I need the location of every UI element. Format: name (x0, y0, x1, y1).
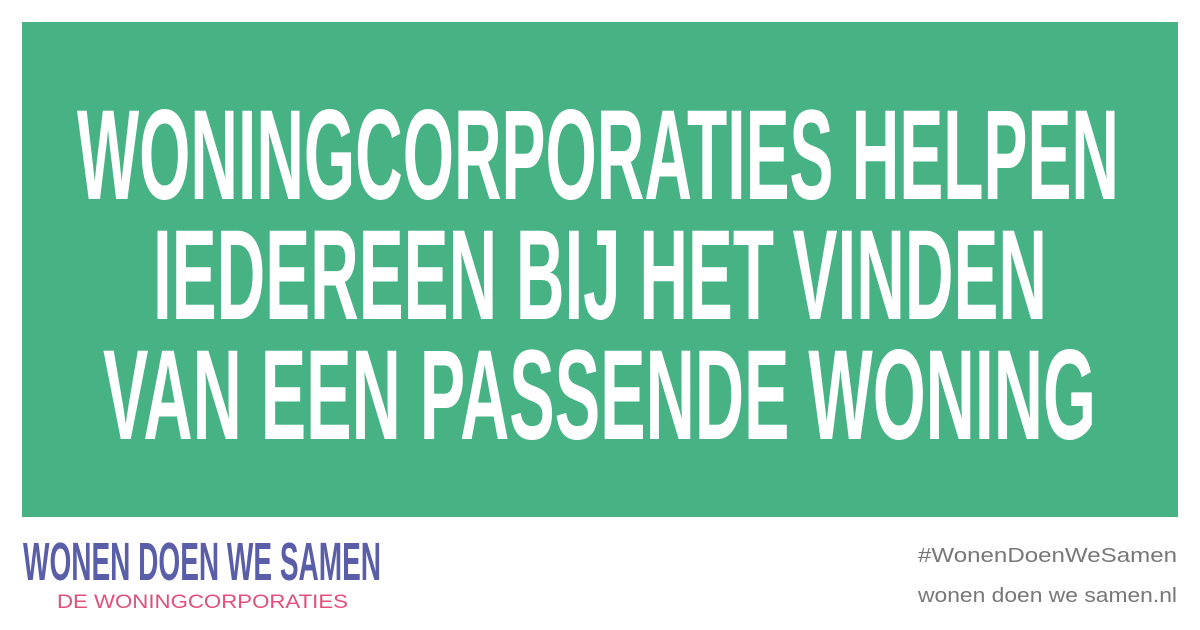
text block: hashtag and website: wonen doen we samen.nl (917, 584, 1177, 607)
logo: Wonen doen we samen: DE WONINGCORPORATIES (57, 591, 348, 613)
logo: Wonen doen we samen: WONEN DOEN WE SAMEN (23, 532, 381, 592)
text block: hashtag and website (917, 544, 1177, 607)
text block: hashtag and website: #WonenDoenWeSamen (918, 544, 1177, 567)
heading: headline text (77, 84, 1119, 467)
panel: green headline box (22, 22, 1178, 517)
logo: Wonen doen we samen (23, 532, 381, 613)
